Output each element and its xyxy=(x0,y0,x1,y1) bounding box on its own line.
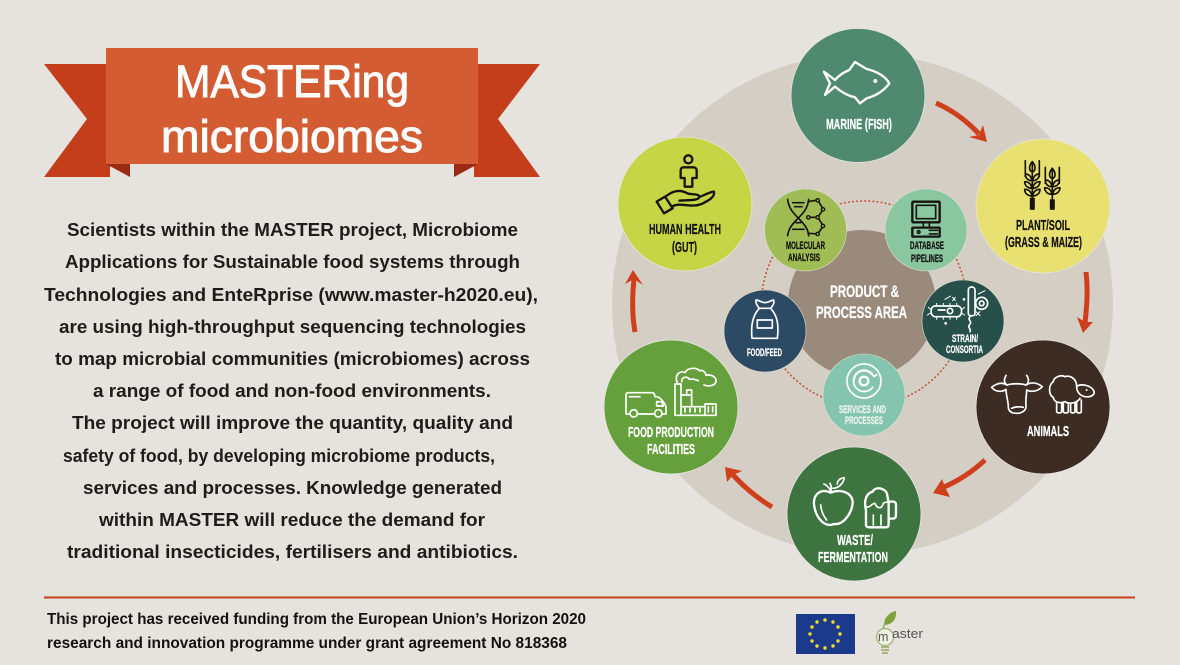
node: database pipelines: DATABASE xyxy=(910,240,944,252)
project description text: a range of food and non-food environments. xyxy=(93,381,491,401)
project description text: Scientists within the MASTER project, Microbiome xyxy=(67,220,518,240)
title text: microbiomes xyxy=(161,111,423,162)
arrow: marine to plant xyxy=(936,103,987,142)
node: human health xyxy=(618,137,752,271)
node: strain and consortia: STRAIN/ xyxy=(952,333,978,345)
node: food and feed xyxy=(724,290,806,372)
title text xyxy=(161,56,423,162)
node: human health: (GUT) xyxy=(672,239,697,256)
project description text: Applications for Sustainable food systems through xyxy=(65,252,520,272)
node: strain and consortia xyxy=(922,280,1004,362)
icon: microbes xyxy=(927,287,988,332)
project description text: traditional insecticides, fertilisers and antibiotics. xyxy=(67,542,518,562)
node: food production facilities: FOOD PRODUCTION xyxy=(628,424,714,441)
project description text: within MASTER will reduce the demand for xyxy=(98,510,485,530)
title banner xyxy=(44,48,540,177)
arrow: waste to food production xyxy=(725,467,772,507)
arrow: plant to animals xyxy=(1077,272,1093,333)
central product and process area: PROCESS AREA xyxy=(816,303,907,322)
project description text: are using high-throughput sequencing technologies xyxy=(59,317,526,337)
icon: DNA helix xyxy=(788,199,825,236)
node: waste and fermentation xyxy=(787,447,921,581)
master logo xyxy=(876,611,923,653)
node: molecular analysis: MOLECULAR xyxy=(786,240,825,252)
node: services and processes xyxy=(823,354,905,436)
funding statement: research and innovation programme under grant agreement No 818368 xyxy=(47,635,567,652)
project description text: to map microbial communities (microbiomes) across xyxy=(55,349,530,369)
node: human health: HUMAN HEALTH xyxy=(649,221,721,238)
node: plant and soil: (GRASS & MAIZE) xyxy=(1005,234,1082,251)
funding statement: This project has received funding from the European Union’s Horizon 2020 xyxy=(47,611,586,628)
node: plant and soil: PLANT/SOIL xyxy=(1016,217,1070,234)
master logo: m xyxy=(878,630,888,644)
node: services and processes: PROCESSES xyxy=(845,415,883,427)
icon: cow and sheep xyxy=(992,375,1094,413)
title text: MASTERing xyxy=(175,56,409,107)
icon: person on hand xyxy=(657,155,714,213)
icon: fish xyxy=(824,62,889,103)
central product and process area xyxy=(788,230,936,378)
arrow: animals to waste xyxy=(933,460,985,497)
project description text: services and processes. Knowledge generated xyxy=(83,478,502,498)
node: food and feed: FOOD/FEED xyxy=(747,347,782,359)
node: waste and fermentation: FERMENTATION xyxy=(818,549,888,566)
icon: sack xyxy=(752,300,778,338)
node: molecular analysis: ANALYSIS xyxy=(788,252,820,264)
arrow: food production to human health xyxy=(625,270,643,332)
icon: wheat xyxy=(1025,161,1060,209)
funding statement xyxy=(47,611,586,652)
central product and process area: PRODUCT & xyxy=(830,282,899,301)
icon: computer xyxy=(912,202,940,237)
icon: truck and factory xyxy=(626,368,716,417)
node: marine: MARINE (FISH) xyxy=(826,116,892,133)
node: food production facilities: FACILITIES xyxy=(647,441,695,458)
project description text xyxy=(44,220,538,562)
project description text: safety of food, by developing microbiome products, xyxy=(63,446,495,466)
project description text: Technologies and EnteRprise (www.master-h2020.eu), xyxy=(44,285,538,305)
node: plant and soil xyxy=(976,139,1110,273)
node: marine xyxy=(791,28,925,162)
node: animals: ANIMALS xyxy=(1027,423,1069,440)
node: molecular analysis xyxy=(764,189,846,271)
icon: apple and beer xyxy=(814,478,896,527)
node: animals xyxy=(976,340,1110,474)
background ring xyxy=(612,54,1113,554)
project description text: The project will improve the quantity, quality and xyxy=(72,413,513,433)
node: strain and consortia: CONSORTIA xyxy=(946,344,983,356)
EU flag logo xyxy=(796,614,855,654)
node: database pipelines: PIPELINES xyxy=(911,253,943,265)
node: services and processes: SERVICES AND xyxy=(839,404,886,416)
node: food production facilities xyxy=(604,340,738,474)
icon: gear cycle xyxy=(847,364,881,398)
node: waste and fermentation: WASTE/ xyxy=(837,532,874,549)
node: database pipelines xyxy=(885,189,967,271)
master logo: aster xyxy=(892,627,923,641)
